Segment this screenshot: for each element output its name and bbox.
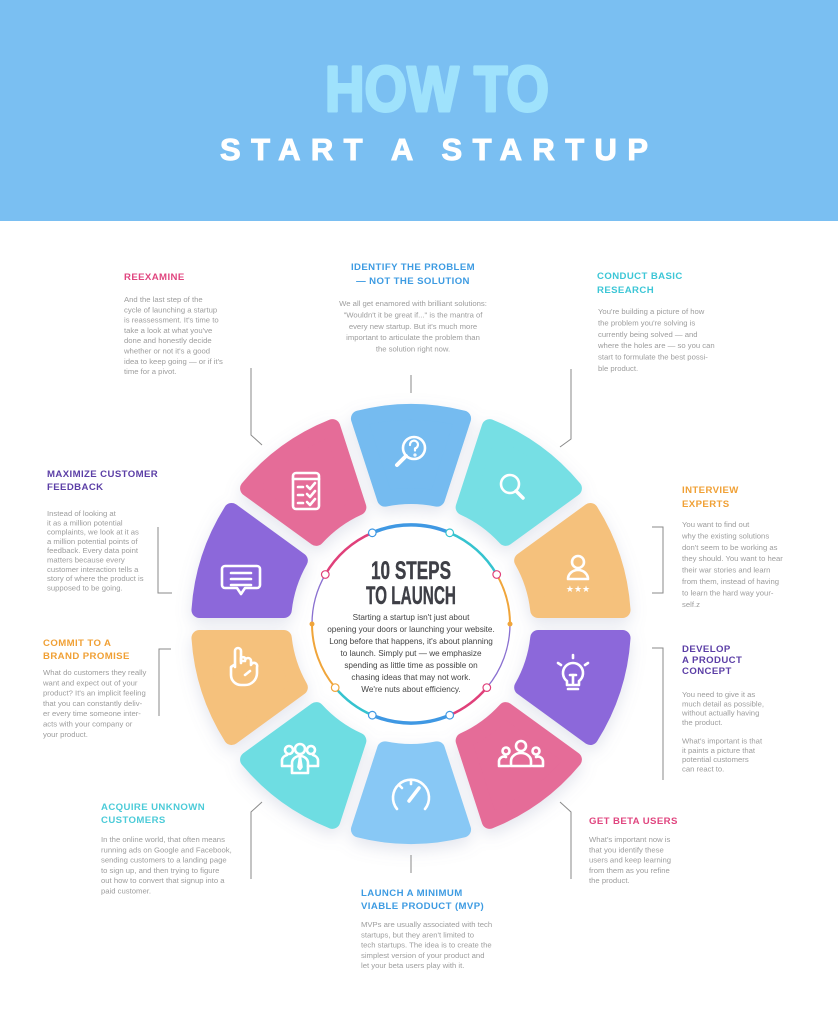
text: maximize customer feedback: FEEDBACK: [47, 482, 104, 493]
text: acquire unknown customers: paid customer.: [101, 886, 151, 896]
text: get beta users: that you identify these: [589, 845, 664, 854]
text: acquire unknown customers: [101, 802, 232, 896]
icon: expert person with stars: ★★★: [566, 585, 590, 595]
text: reexamine: [123, 272, 223, 376]
text: identify the problem: — NOT THE SOLUTION: [356, 276, 470, 287]
text: identify the problem: We all get enamored with brilliant solutions:: [339, 299, 487, 308]
text: launch mvp: startups, but they aren't limited to: [361, 930, 474, 939]
center text: [327, 613, 495, 694]
text: reexamine: take a look at what you've: [124, 326, 212, 335]
text: acquire unknown customers: ACQUIRE UNKNOWN: [101, 802, 205, 813]
text: develop a product concept: potential customers: [682, 755, 749, 764]
center heading: 10 STEPS TO LAUNCH: TO LAUNCH: [366, 582, 456, 610]
text: commit to a brand promise: BRAND PROMISE: [43, 651, 130, 662]
text: launch mvp: tech startups. The idea is to create the: [361, 941, 492, 950]
text: interview experts: You want to find out: [682, 520, 750, 529]
text: conduct basic research: You're building a picture of how: [598, 307, 705, 316]
text: identify the problem: important to articulate the problem than: [346, 333, 480, 342]
text: commit to a brand promise: want and expect out of your: [42, 678, 138, 687]
text: reexamine: REEXAMINE: [124, 272, 185, 283]
text: develop a product concept: the product.: [682, 718, 723, 727]
text: maximize customer feedback: customer interaction tells a: [47, 565, 139, 574]
text: get beta users: the product.: [589, 876, 630, 885]
text: develop a product concept: it paints a picture that: [682, 746, 756, 755]
text: interview experts: why the existing solutions: [681, 531, 769, 540]
text: develop a product concept: CONCEPT: [682, 666, 732, 677]
text: launch mvp: MVPs are usually associated with tech: [361, 920, 492, 929]
header band: [0, 0, 838, 221]
subtitle: START A STARTUP: START A STARTUP: [220, 132, 648, 167]
text: reexamine: time for a pivot.: [124, 367, 177, 376]
icon: light bulb: [558, 655, 588, 689]
text: interview experts: to learn the hard way your-: [682, 588, 774, 597]
text: launch mvp: let your beta users play with it.: [361, 961, 464, 970]
text: maximize customer feedback: Instead of looking at: [47, 509, 117, 518]
text: identify the problem: "Wouldn't it be great if..." is the mantra of: [344, 310, 483, 319]
text: interview experts: INTERVIEW: [682, 485, 739, 496]
icon: hand gesture: [231, 648, 257, 685]
text: commit to a brand promise: acts with your company or: [43, 720, 133, 728]
text: identify the problem: every new startup. But it's much more: [349, 322, 477, 331]
text: conduct basic research: currently being solved — and: [598, 330, 698, 339]
text: commit to a brand promise: product? It's an implicit feeling: [43, 689, 146, 698]
text: conduct basic research: ble product.: [598, 364, 638, 373]
text: acquire unknown customers: to sign up, and then trying to figure: [101, 866, 219, 875]
text: develop a product concept: can react to.: [682, 764, 724, 773]
text: identify the problem: [339, 262, 487, 354]
text: commit to a brand promise: er every time someone inter-: [43, 709, 141, 718]
text: commit to a brand promise: COMMIT TO A: [43, 638, 111, 649]
text: maximize customer feedback: complaints, we look at it as: [47, 528, 139, 537]
text: reexamine: cycle of launching a startup: [124, 305, 217, 314]
text: develop a product concept: [681, 644, 764, 773]
text: develop a product concept: without actually having: [681, 709, 759, 718]
icon: checklist: [293, 473, 319, 509]
text: get beta users: from them as you refine: [589, 866, 670, 875]
text: launch mvp: VIABLE PRODUCT (MVP): [361, 901, 484, 912]
text: maximize customer feedback: supposed to be going.: [47, 583, 123, 592]
center heading: 10 STEPS TO LAUNCH: [366, 557, 456, 610]
center text: spending as little time as possible on: [344, 661, 478, 670]
text: interview experts: [681, 485, 783, 609]
center text: Starting a startup isn't just about: [353, 613, 470, 622]
wheel of 10 segments: [193, 412, 629, 836]
text: interview experts: self.z: [682, 600, 700, 609]
center ring: [310, 525, 512, 723]
text: maximize customer feedback: it as a million potential: [47, 518, 123, 527]
icon: chat bubble: [222, 566, 260, 594]
text: interview experts: don't seem to be working as: [682, 543, 778, 552]
icon: speedometer: [393, 780, 429, 809]
text: conduct basic research: where the holes are — so you can: [597, 341, 715, 350]
text: conduct basic research: start to formulate the best possi-: [598, 353, 708, 362]
text: reexamine: is reassessment. It's time to: [124, 316, 219, 325]
text: get beta users: users and keep learning: [589, 856, 671, 865]
text: acquire unknown customers: In the online world, that often means: [101, 835, 225, 844]
text: acquire unknown customers: out how to convert that signup into a: [101, 876, 225, 885]
center text: opening your doors or launching your website.: [327, 625, 495, 634]
text: conduct basic research: the problem you're solving is: [598, 318, 695, 327]
center heading: 10 STEPS TO LAUNCH: 10 STEPS: [371, 557, 451, 585]
text: develop a product concept: A PRODUCT: [682, 655, 742, 666]
text: maximize customer feedback: story of where the product is: [47, 574, 144, 583]
icon: group of users: [499, 741, 543, 766]
text: develop a product concept: much detail as possible,: [682, 699, 764, 708]
icon: team with tie: [282, 744, 318, 773]
text: reexamine: idea to keep going — or if it's: [124, 357, 223, 366]
text: get beta users: GET BETA USERS: [589, 816, 678, 827]
text: conduct basic research: [597, 271, 715, 373]
title: HOW TO: HOW TO: [325, 53, 549, 125]
connector lines: [158, 368, 663, 879]
text: maximize customer feedback: MAXIMIZE CUSTOMER: [47, 469, 158, 480]
text: commit to a brand promise: What do customers they really: [43, 668, 147, 677]
text: maximize customer feedback: [47, 469, 158, 592]
text: interview experts: their war stories and learn: [682, 566, 770, 575]
center text: to launch. Simply put — we emphasize: [340, 649, 482, 658]
text: acquire unknown customers: CUSTOMERS: [101, 815, 166, 826]
icon: magnifier: [501, 475, 523, 498]
text: maximize customer feedback: matters because every: [47, 556, 125, 564]
text: identify the problem: IDENTIFY THE PROBLEM: [351, 262, 475, 273]
text: develop a product concept: You need to give it as: [682, 690, 755, 699]
text: get beta users: [589, 816, 678, 885]
center text: Long before that happens, it's about planning: [329, 637, 493, 646]
text: commit to a brand promise: [42, 638, 147, 739]
text: conduct basic research: CONDUCT BASIC: [597, 271, 683, 282]
text: conduct basic research: RESEARCH: [597, 285, 654, 296]
text: reexamine: done and honestly decide: [124, 336, 212, 345]
text: launch mvp: [361, 888, 492, 970]
icon: expert person with stars: [566, 556, 590, 595]
text: develop a product concept: What's important is that: [682, 736, 763, 746]
text: get beta users: What's important now is: [589, 835, 671, 844]
text: interview experts: from them, instead of having: [682, 577, 779, 586]
text: acquire unknown customers: running ads on Google and Facebook,: [101, 845, 232, 854]
text: reexamine: And the last step of the: [124, 295, 203, 304]
text: acquire unknown customers: sending customers to a landing page: [101, 856, 227, 865]
text: commit to a brand promise: that you can constantly deliv-: [43, 699, 143, 708]
text: maximize customer feedback: feedback. Every data point: [47, 546, 139, 555]
text: identify the problem: the solution right now.: [376, 345, 450, 354]
icon: question magnifier: [397, 437, 425, 465]
text: launch mvp: LAUNCH A MINIMUM: [361, 888, 463, 899]
center text: chasing ideas that may not work.: [351, 673, 471, 682]
text: reexamine: whether or not it's a good: [123, 346, 210, 356]
center text: We're nuts about efficiency.: [361, 685, 461, 694]
text: maximize customer feedback: a million potential points of: [47, 537, 138, 546]
text: develop a product concept: DEVELOP: [682, 644, 731, 655]
text: commit to a brand promise: your product.: [43, 730, 88, 739]
text: launch mvp: simplest version of your product and: [361, 951, 484, 960]
text: interview experts: they should. You want to hear: [682, 554, 783, 563]
text: interview experts: EXPERTS: [682, 499, 730, 510]
